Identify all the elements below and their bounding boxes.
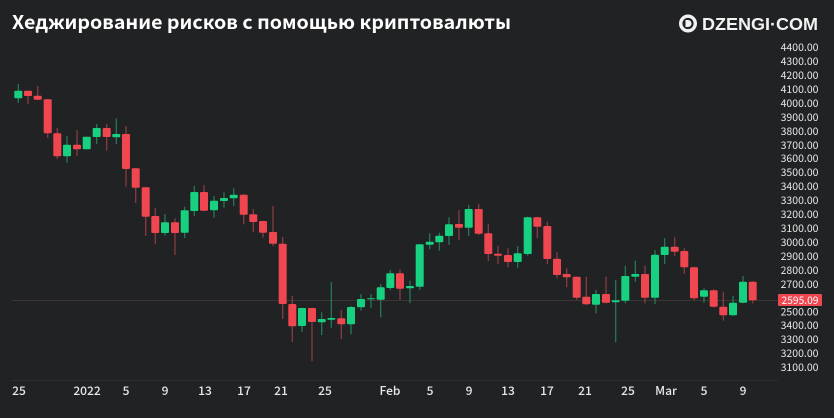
time axis labels: Feb bbox=[380, 382, 400, 399]
price axis labels: 3500.00 bbox=[781, 165, 819, 180]
price axis labels: 3300.00 bbox=[781, 193, 819, 208]
price axis labels: 2700.00 bbox=[781, 277, 819, 292]
time axis labels: Mar bbox=[655, 382, 677, 399]
title: Хеджирование рисков с помощью криптовалюты bbox=[12, 8, 511, 35]
current price line bbox=[12, 300, 778, 302]
price axis labels bbox=[781, 40, 819, 375]
time axis labels: 2022 bbox=[73, 382, 101, 399]
logo: dzengi.com: DZENGI·COM bbox=[702, 14, 818, 34]
time axis labels: 9 bbox=[740, 382, 747, 399]
price axis labels: 3000.00 bbox=[781, 235, 819, 250]
price axis labels: 3800.00 bbox=[781, 124, 819, 139]
current price tag: 2595.09 bbox=[782, 293, 819, 308]
price axis labels: 3600.00 bbox=[781, 151, 819, 166]
time axis labels: 13 bbox=[501, 382, 515, 399]
time axis labels: 17 bbox=[540, 382, 554, 399]
time axis labels: 5 bbox=[123, 382, 130, 399]
price axis labels: 3200.00 bbox=[781, 207, 819, 222]
price axis labels: 4200.00 bbox=[781, 68, 819, 83]
price axis labels: 3100.00 bbox=[781, 221, 819, 236]
time axis labels: 9 bbox=[466, 382, 473, 399]
price axis labels: 4300.00 bbox=[781, 54, 819, 69]
price axis labels: 2500.00 bbox=[781, 304, 819, 320]
price axis labels: 4400.00 bbox=[781, 40, 819, 55]
price axis labels: 3100.00 bbox=[781, 360, 819, 375]
candlestick chart bbox=[14, 84, 757, 361]
price axis labels: 3400.00 bbox=[781, 179, 819, 194]
time axis labels: 5 bbox=[701, 382, 708, 399]
price axis labels: 2800.00 bbox=[781, 263, 819, 278]
time axis labels: 17 bbox=[237, 382, 251, 399]
time axis labels: 13 bbox=[198, 382, 212, 399]
price axis labels: 3200.00 bbox=[781, 346, 819, 361]
price axis labels: 3900.00 bbox=[781, 110, 819, 125]
time axis line bbox=[12, 380, 778, 382]
time axis labels: 9 bbox=[162, 382, 169, 399]
time axis labels: 5 bbox=[427, 382, 434, 399]
time axis labels: 25 bbox=[12, 382, 26, 399]
price axis labels: 3300.00 bbox=[781, 332, 819, 347]
price axis labels: 4000.00 bbox=[781, 96, 819, 111]
time axis labels: 21 bbox=[578, 382, 592, 399]
price axis labels: 3400.00 bbox=[781, 318, 819, 333]
time axis labels bbox=[12, 382, 747, 399]
time axis labels: 25 bbox=[621, 382, 635, 399]
time axis labels: 21 bbox=[274, 382, 288, 399]
price axis labels: 2900.00 bbox=[781, 249, 819, 264]
price axis labels: 4100.00 bbox=[781, 82, 819, 97]
price axis labels: 3700.00 bbox=[781, 138, 819, 153]
time axis labels: 25 bbox=[318, 382, 332, 399]
